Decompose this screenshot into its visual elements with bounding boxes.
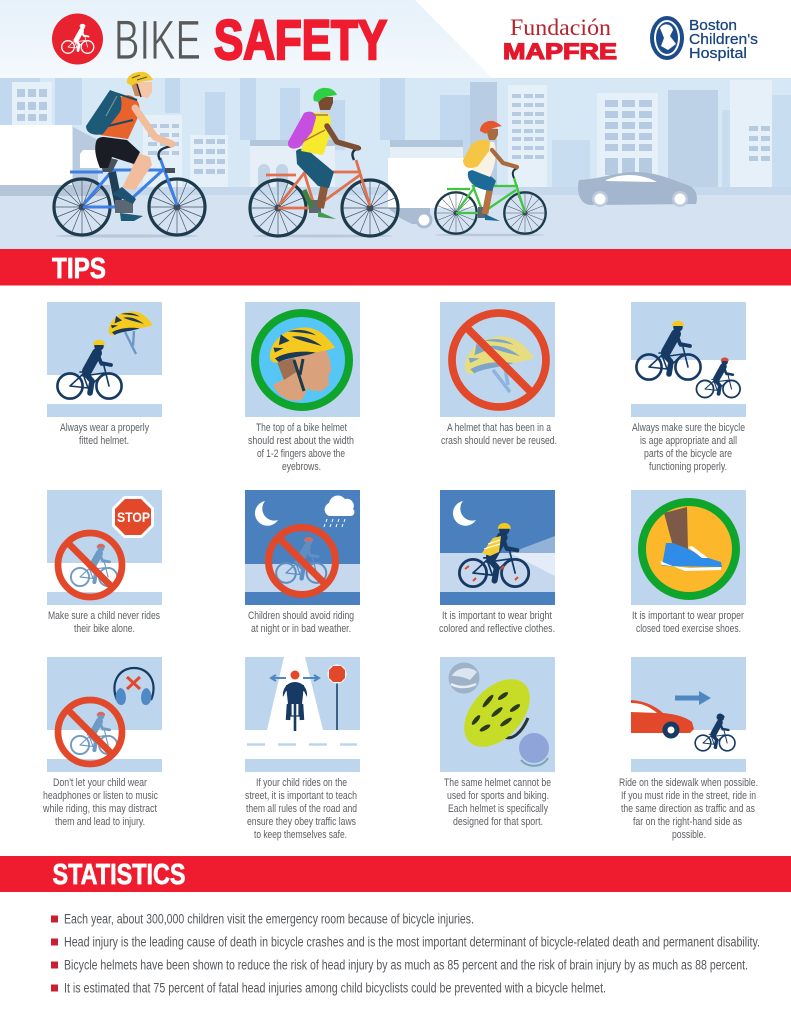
caption: the same direction as traffic and as (621, 803, 755, 815)
caption: them and lead to injury. (55, 816, 145, 828)
title (114, 8, 387, 71)
white truck (0, 125, 110, 196)
banner: tips: TIPS (52, 253, 106, 285)
caption: functioning properly. (649, 461, 727, 473)
tile illustration (631, 657, 746, 772)
logo: Fundacion Mapfre: MAPFRE (503, 39, 617, 64)
caption: The top of a bike helmet (256, 422, 348, 434)
caption (632, 422, 745, 473)
tile illustration (631, 302, 746, 417)
caption: Make sure a child never rides (48, 610, 160, 622)
icon: red circle cyclist (52, 14, 103, 64)
caption: while riding, this may distract (42, 803, 158, 815)
icon: road sign (328, 664, 346, 730)
caption: Don't let your child wear (53, 777, 147, 789)
tip: reflective clothes (439, 490, 555, 635)
tile illustration (440, 490, 555, 605)
caption: Children should avoid riding (248, 610, 354, 622)
cyclist with yellow helmet and blue bike (54, 72, 205, 238)
tip: closed toed shoes (631, 490, 746, 635)
caption (632, 610, 744, 635)
statistic 1: Each year, about 300,000 children visit the emergency room because of bicycle injuries. (64, 912, 474, 926)
caption: headphones or listen to music (43, 790, 158, 802)
caption: eyebrows. (282, 461, 321, 473)
logo: bike safety title (52, 8, 387, 71)
statistic 4: It is estimated that 75 percent of fatal head injuries among child bicyclists could be prevented with a bicycle helmet. (64, 980, 606, 996)
banner: statistics (0, 856, 791, 892)
caption (248, 610, 354, 635)
cyclist with green helmet and orange bike (250, 88, 398, 238)
icon: blue helmet (519, 733, 549, 766)
logo: Boston Children's Hospital: Children's (689, 31, 758, 48)
logo: Boston Children's Hospital: Hospital (689, 45, 747, 62)
tile illustration (47, 490, 162, 605)
tip: ride with traffic (619, 657, 758, 841)
caption (48, 610, 160, 635)
icon: headphones (114, 668, 154, 705)
icon: moon (255, 501, 278, 526)
icon: red car (631, 700, 694, 738)
banner: statistics: STATISTICS (52, 859, 186, 891)
title: BIKE (114, 8, 201, 71)
tile illustration (47, 302, 162, 417)
icon: stop sign: STOP (117, 509, 150, 525)
caption: colored and reflective clothes. (439, 623, 555, 635)
caption: should rest about the width (248, 435, 354, 447)
tip: never ride alone (47, 490, 162, 635)
caption: to keep themselves safe. (254, 829, 347, 841)
title: SAFETY (214, 8, 387, 71)
caption: Always wear a properly (60, 422, 149, 434)
caption: It is important to wear bright (442, 610, 553, 622)
icon: arrow (675, 691, 711, 705)
logo: Fundacion Mapfre: Fundación (510, 15, 612, 40)
tip: never reuse helmet (440, 302, 557, 447)
tile illustration (440, 302, 555, 417)
caption (444, 777, 551, 828)
caption: fitted helmet. (79, 435, 129, 447)
logo: Boston Children's Hospital (650, 16, 758, 62)
caption: closed toed exercise shoes. (636, 623, 741, 635)
tip: age appropriate bicycle (631, 302, 746, 473)
caption: far on the right-hand side as (633, 816, 742, 828)
caption (60, 422, 149, 447)
banner: tips (0, 249, 791, 286)
header background (0, 0, 791, 249)
caption: their bike alone. (74, 623, 135, 635)
caption: parts of the bicycle are (644, 448, 732, 460)
caption: possible. (672, 829, 706, 841)
caption (248, 422, 354, 473)
caption: used for sports and biking. (447, 790, 549, 802)
caption: crash should never be reused. (441, 435, 557, 447)
icon: grey helmet (448, 662, 480, 694)
caption (619, 777, 758, 841)
caption (245, 777, 357, 841)
caption: street, it is important to teach (245, 790, 357, 802)
caption (441, 422, 557, 447)
tip: sport-specific helmets (440, 657, 555, 828)
caption: designed for that sport. (453, 816, 543, 828)
white van (388, 158, 490, 228)
arrows: look both ways (271, 675, 319, 681)
tile illustration (631, 490, 746, 605)
caption: It is important to wear proper (632, 610, 744, 622)
city skyline (0, 78, 791, 196)
caption: at night or in bad weather. (251, 623, 351, 635)
caption: If your child rides on the (256, 777, 347, 789)
caption: The same helmet cannot be (444, 777, 551, 789)
caption: is age appropriate and all (640, 435, 737, 447)
icon: moon (453, 501, 476, 526)
caption: ensure they obey traffic laws (247, 816, 356, 828)
tile illustration (245, 490, 360, 605)
logo: Boston Children's Hospital: Boston (689, 17, 737, 34)
caption: of 1-2 fingers above the (257, 448, 345, 460)
caption: A helmet that has been in a (447, 422, 552, 434)
caption (439, 610, 555, 635)
icon: lime helmet (451, 667, 543, 759)
icon: cloud (324, 495, 354, 527)
caption: them all rules of the road and (246, 803, 357, 815)
tile illustration (440, 657, 555, 772)
statistics list (51, 912, 760, 996)
tip: rules of the road (245, 657, 360, 841)
caption: Each helmet is specifically (448, 803, 548, 815)
caption (42, 777, 158, 828)
tile illustration (245, 302, 360, 417)
caption: Always make sure the bicycle (632, 422, 745, 434)
cyclist with orange helmet and green bike (435, 121, 546, 236)
tip: avoid night and bad weather (245, 490, 360, 635)
tip: no headphones (42, 657, 162, 828)
tip: helmet position (245, 302, 360, 473)
tile illustration (47, 657, 162, 772)
tip: wear helmet (47, 302, 162, 447)
tile illustration (245, 657, 360, 772)
logo: Fundacion Mapfre (503, 15, 617, 64)
rider from behind (283, 670, 307, 731)
road (0, 195, 791, 249)
grey car (578, 172, 697, 207)
hero street scene (0, 72, 791, 249)
